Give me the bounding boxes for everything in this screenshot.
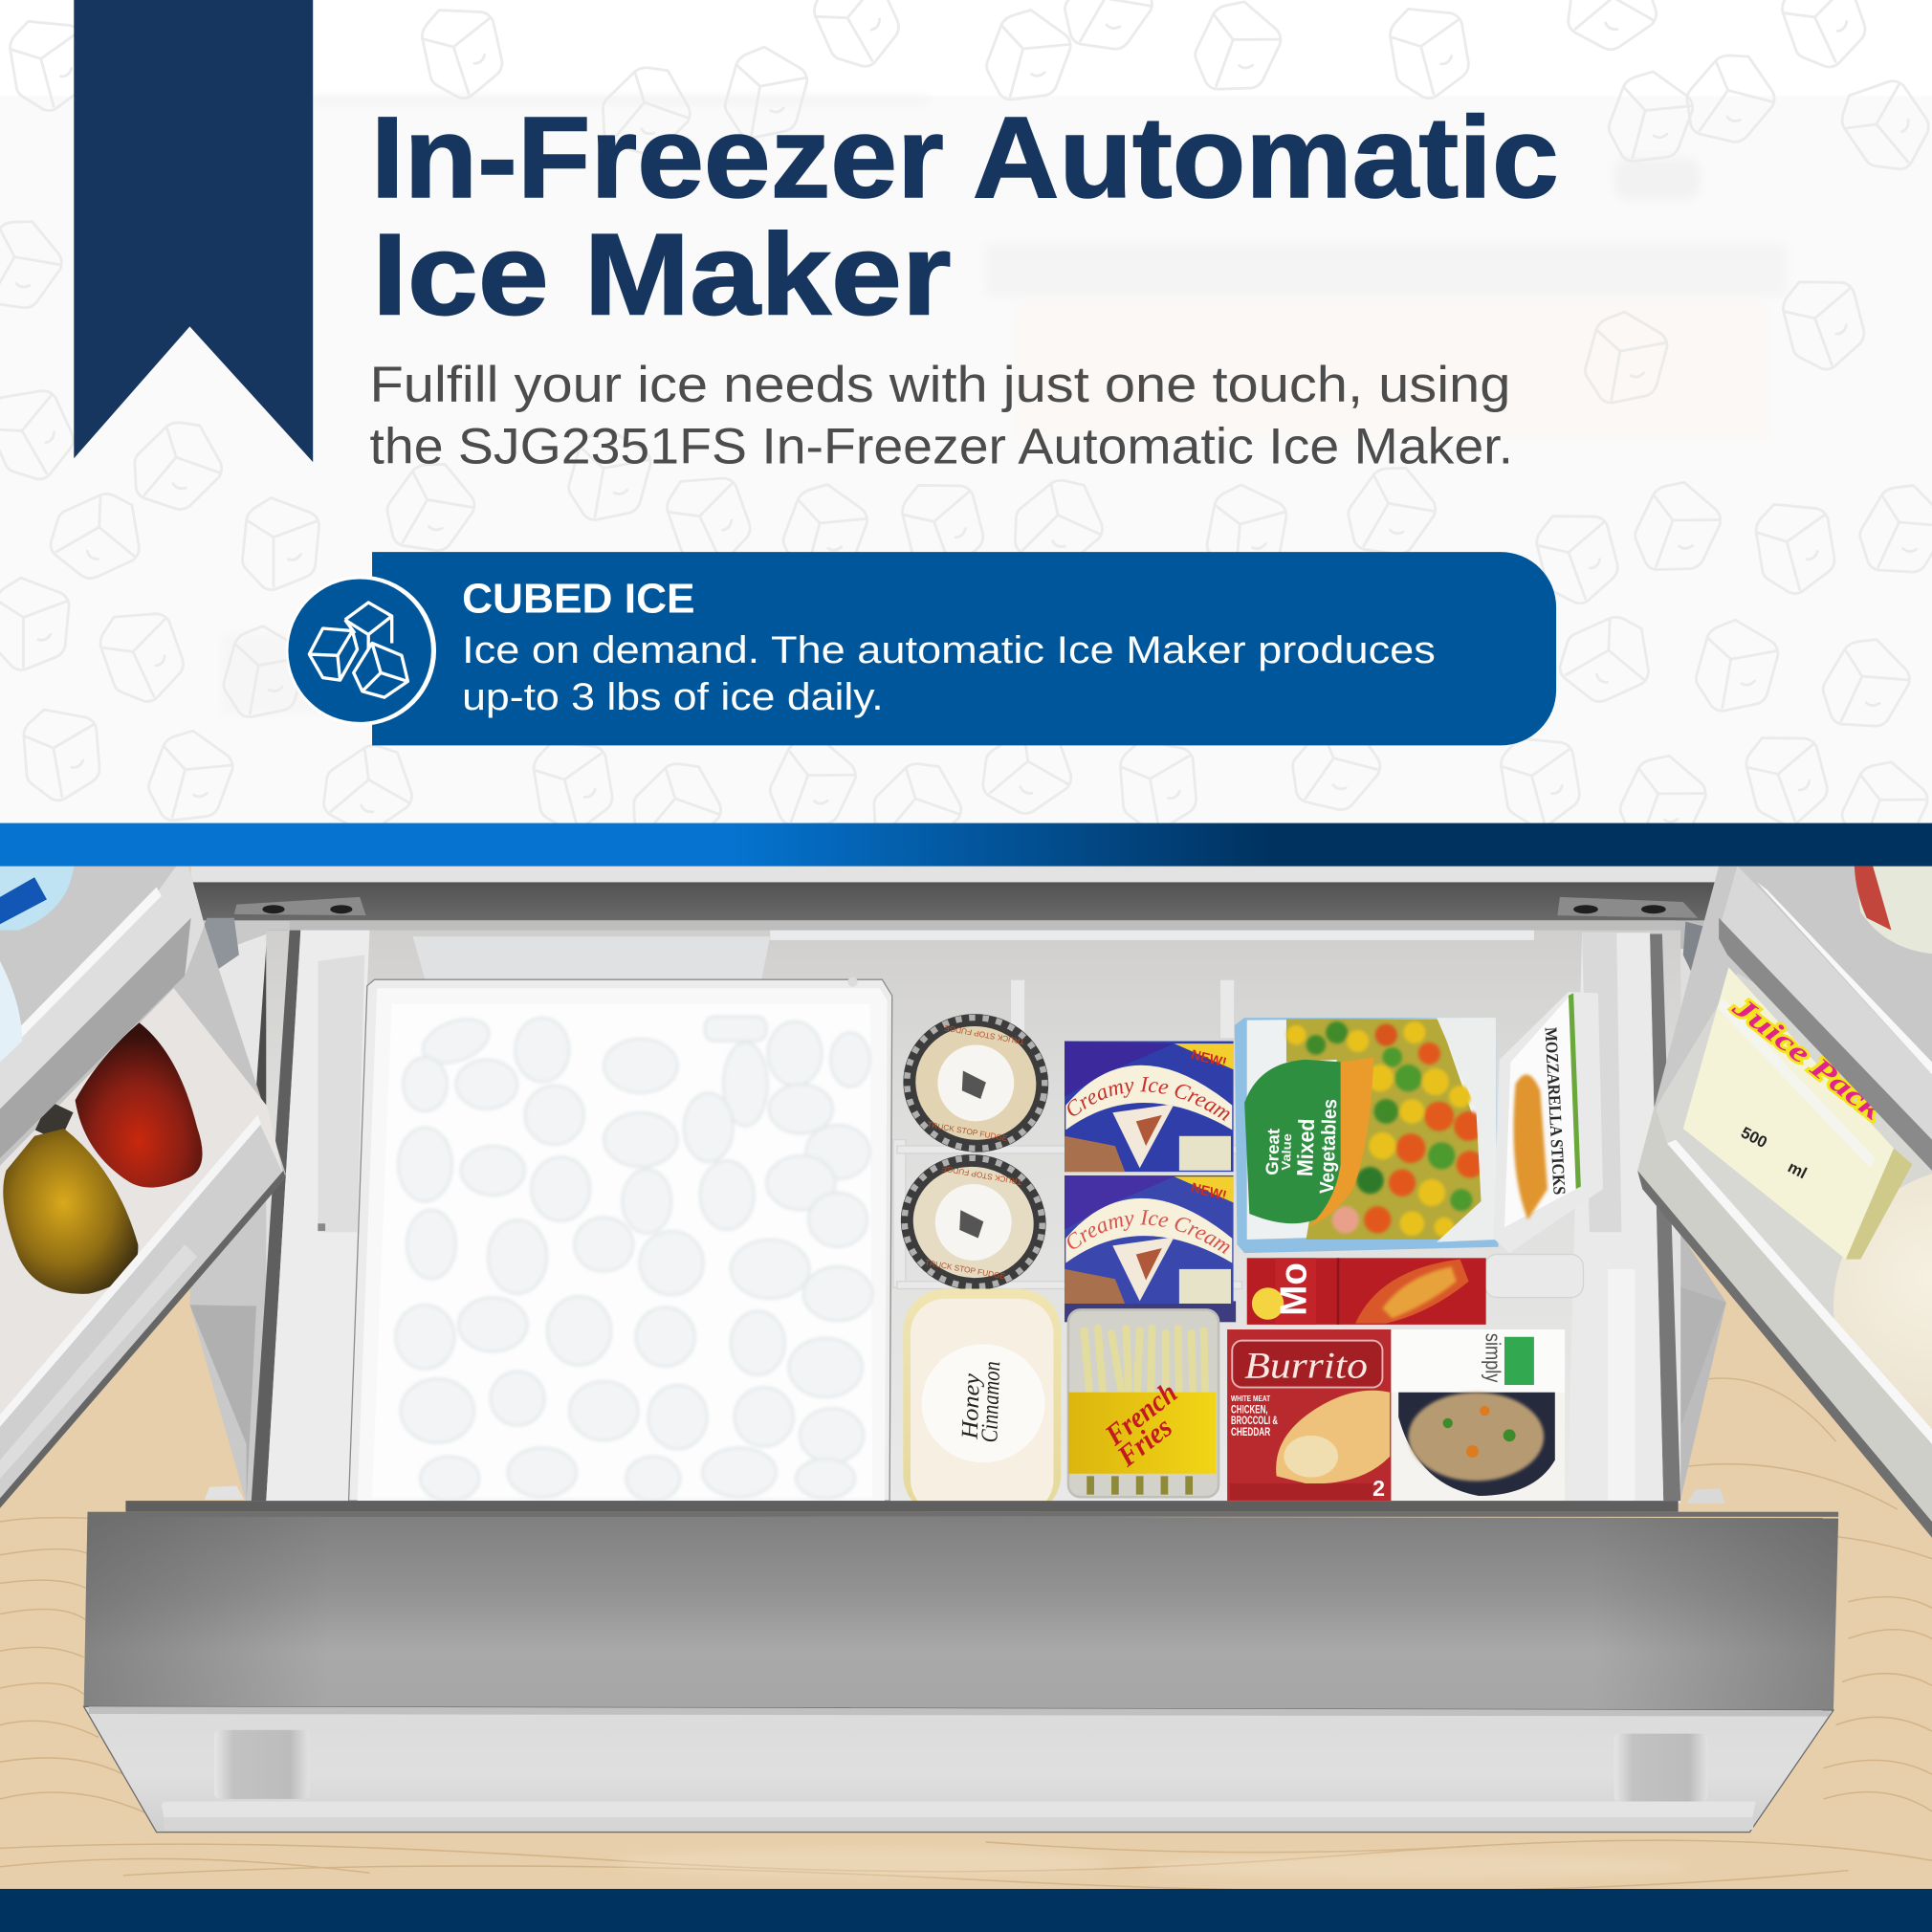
title: In-Freezer Automatic xyxy=(371,92,1559,222)
food: ice cream box 2 xyxy=(1065,1175,1236,1322)
food: mixed vegetables bag: Mixed xyxy=(1292,1118,1319,1176)
food: mixed vegetables bag: Vegetables xyxy=(1316,1099,1341,1195)
subtitle: Fulfill your ice needs with just one touch, using xyxy=(369,357,1510,413)
food: honey cinnamon tub: Honey xyxy=(957,1373,985,1440)
food: french fries tray xyxy=(1068,1309,1218,1497)
food: burrito box: CHEDDAR xyxy=(1231,1427,1271,1438)
left hinge xyxy=(197,897,366,974)
food: honey cinnamon tub xyxy=(903,1289,1061,1517)
food: ice cream box 1 xyxy=(1065,1041,1234,1173)
juice carton: Juice Pack xyxy=(1726,991,1888,1127)
food: mozzarella sticks box: MOZZARELLA STICKS xyxy=(1541,1027,1570,1196)
freezer drawer front xyxy=(84,1486,1838,1833)
red sauce bottle xyxy=(76,1022,203,1188)
right handle recess xyxy=(1614,1734,1708,1801)
fridge top frame and hinges xyxy=(191,867,1737,986)
food: mixed vegetables bag xyxy=(1235,1018,1499,1253)
fridge body sides xyxy=(185,882,1744,1504)
ice bin with ice cubes xyxy=(349,977,892,1501)
juice carton xyxy=(1683,967,1912,1260)
title: Ice Maker xyxy=(372,209,952,340)
food: french fries tray: French xyxy=(1098,1375,1183,1452)
ice cubes xyxy=(396,1011,872,1501)
food: burrito box: 2 xyxy=(1372,1476,1385,1501)
drawer interior xyxy=(252,931,1680,1504)
food: ice cream box 2: NEW! xyxy=(1189,1180,1228,1204)
callout: cubed ice xyxy=(286,552,1556,745)
callout body xyxy=(462,629,1436,718)
juice carton: ml xyxy=(1785,1157,1810,1182)
background: freezer interior with ice pattern xyxy=(0,0,1932,868)
food: burrito box: BROCCOLI & xyxy=(1231,1416,1278,1427)
bottom band xyxy=(0,1889,1932,1932)
callout heading: CUBED ICE xyxy=(462,575,695,622)
food: french fries tray: Fries xyxy=(1110,1410,1178,1473)
cream ball xyxy=(1833,1168,1932,1444)
left handle recess xyxy=(214,1730,309,1799)
subtitle: the SJG2351FS In-Freezer Automatic Ice Maker. xyxy=(369,418,1513,474)
food: red box xyxy=(1247,1258,1486,1325)
gradient band xyxy=(0,823,1932,867)
juice carton: 500 xyxy=(1738,1123,1770,1152)
food: ice cream box 1: NEW! xyxy=(1189,1047,1228,1071)
food: ice cream tub 2 xyxy=(890,1143,1057,1302)
food: ice cream tub 2: TRUCK STOP FUDGE xyxy=(940,1164,1022,1187)
food: burrito box xyxy=(1227,1329,1391,1501)
yellow oil bottle xyxy=(3,1101,138,1294)
food: ice cream box 2: Creamy Ice Cream xyxy=(1067,1210,1230,1255)
subtitle xyxy=(369,357,1513,474)
food: simply rice box xyxy=(1391,1329,1565,1501)
food: red box: Mo xyxy=(1274,1262,1315,1316)
bin plate with bottles xyxy=(0,988,286,1508)
food: ice cream tub 1 xyxy=(892,1002,1060,1164)
left door bins xyxy=(0,867,286,1508)
food: mixed vegetables bag: Great xyxy=(1262,1129,1284,1175)
food: ice cream tub 1: TRUCK STOP FUDGE xyxy=(927,1119,1009,1143)
upper bin xyxy=(0,867,205,1158)
right hinge xyxy=(1557,897,1725,986)
callout body: up-to 3 lbs of ice daily. xyxy=(462,676,884,718)
ribbon bookmark xyxy=(74,0,313,462)
food: mixed vegetables bag: Value xyxy=(1279,1133,1294,1171)
food: burrito box: CHICKEN, xyxy=(1231,1405,1268,1416)
lower bin contents xyxy=(1637,967,1932,1538)
upper bin xyxy=(1719,867,1932,1171)
food: burrito box: WHITE MEAT xyxy=(1231,1394,1271,1403)
cup in door xyxy=(1855,867,1932,954)
right door bins xyxy=(1637,867,1932,1538)
food: ice cream tub 1: TRUCK STOP FUDGE xyxy=(943,1023,1025,1046)
food: burrito box: Burrito xyxy=(1244,1346,1368,1386)
title xyxy=(371,92,1559,340)
food: ice cream box 1: Creamy Ice Cream xyxy=(1067,1077,1230,1121)
food: honey cinnamon tub: Cinnamon xyxy=(977,1361,1005,1443)
callout body: Ice on demand. The automatic Ice Maker produces xyxy=(462,629,1436,671)
scene: wood floor xyxy=(0,867,1932,1891)
icon: ice cubes xyxy=(286,576,436,726)
food: mozzarella sticks box xyxy=(1493,992,1603,1253)
food: simply rice box: simply xyxy=(1482,1333,1505,1382)
food: ice cream tub 2: TRUCK STOP FUDGE xyxy=(924,1258,1006,1281)
